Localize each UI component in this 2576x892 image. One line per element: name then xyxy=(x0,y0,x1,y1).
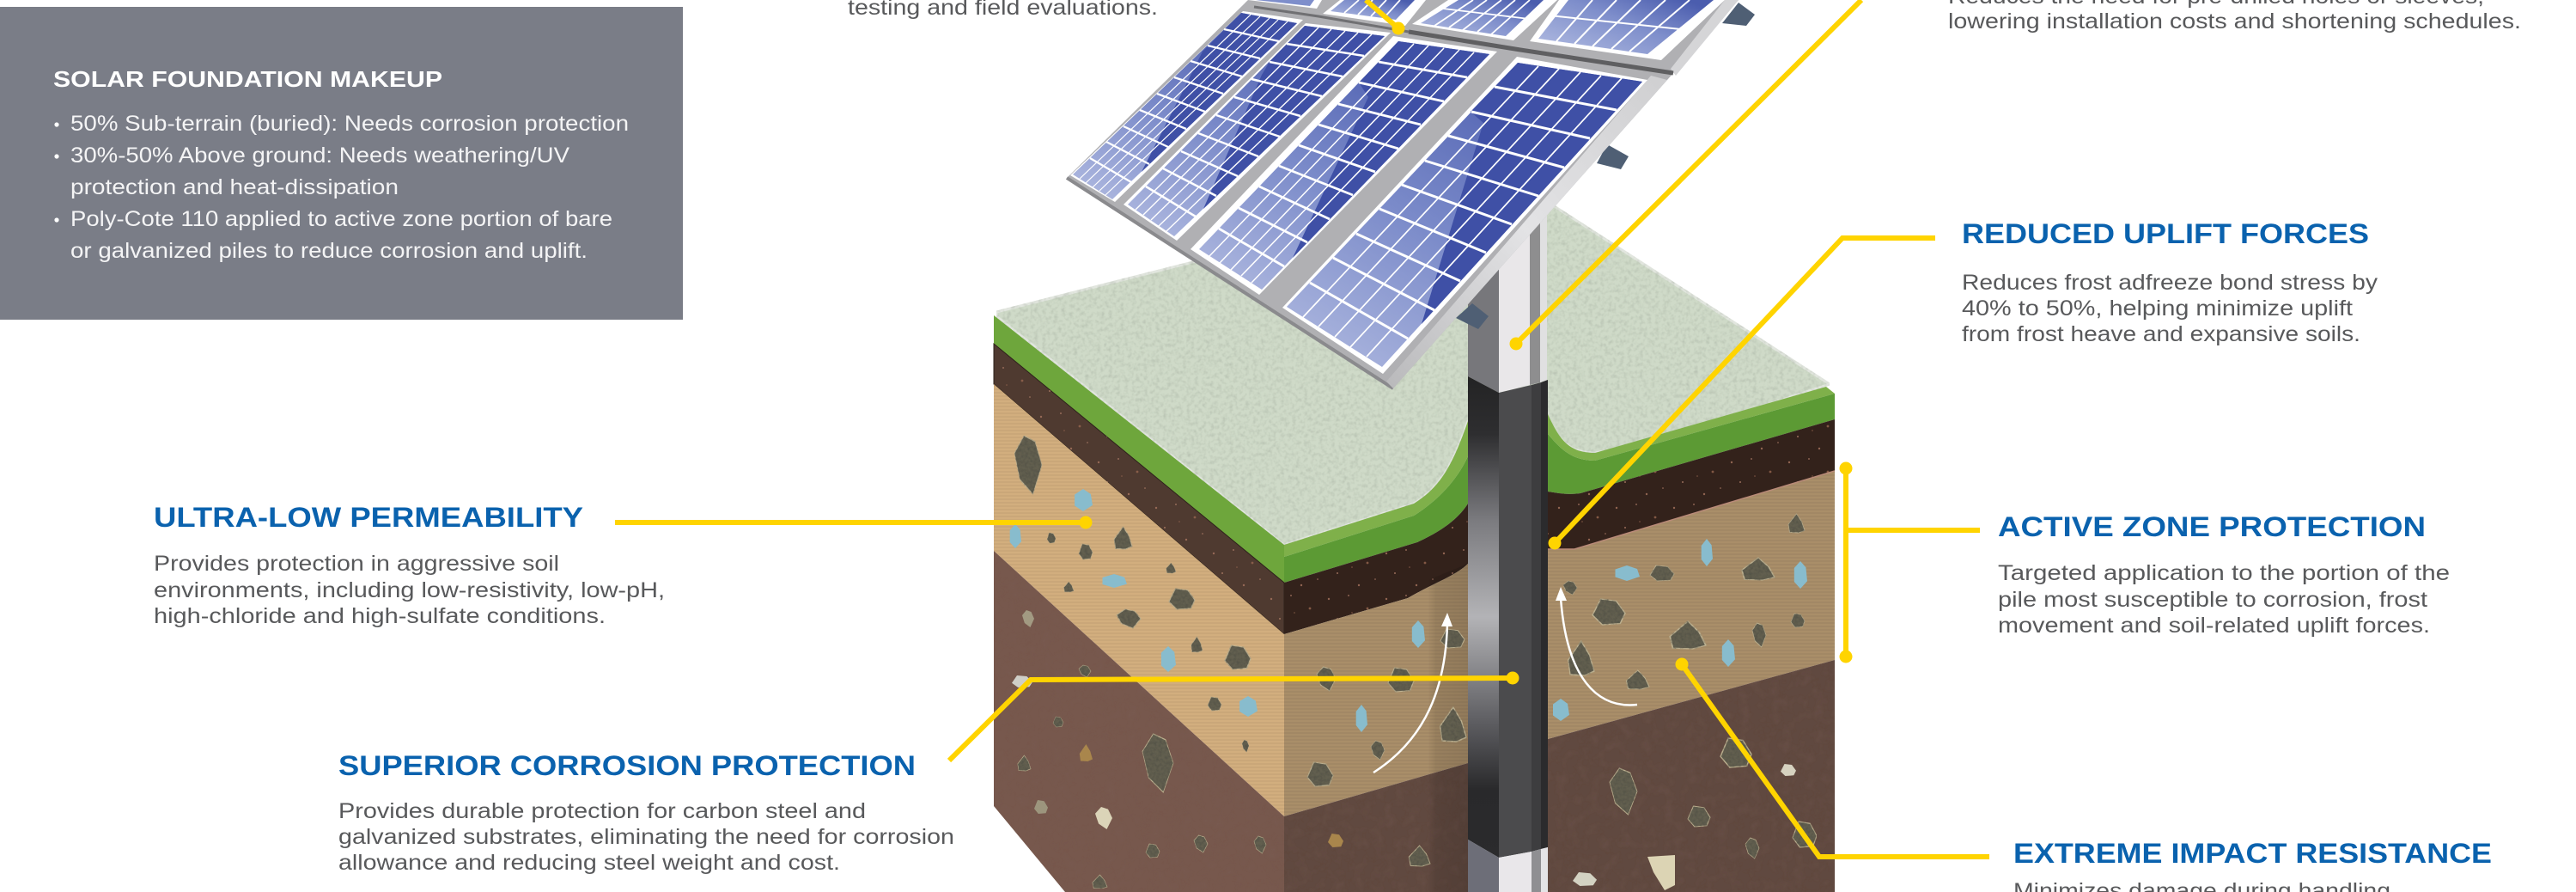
pile xyxy=(1468,198,1548,892)
leader: reduced uplift forces xyxy=(1555,238,1935,543)
leader: panels xyxy=(1366,0,1398,28)
bullet list xyxy=(54,112,629,263)
leader: extreme impact resistance xyxy=(1682,664,1989,857)
shadow beside pile xyxy=(1428,564,1468,892)
callout: superior corrosion protection: Provides durable protection for carbon steel and xyxy=(338,799,866,823)
brown subsoil layer xyxy=(994,551,1835,892)
callout: active zone protection xyxy=(1998,511,2450,638)
callout: reduced uplift forces: Reduces frost adfreeze bond stress by xyxy=(1962,271,2378,295)
callout: active zone protection: Targeted application to the portion of the xyxy=(1998,561,2450,585)
callout: superior corrosion protection: galvanized substrates, eliminating the need for corrosion xyxy=(338,825,954,849)
callout: extreme impact resistance: EXTREME IMPACT RESISTANCE xyxy=(2013,838,2492,869)
illustration: soil block with pile and solar array xyxy=(994,0,1835,892)
rocks xyxy=(1014,436,1817,889)
callout: ultra-low permeability: ULTRA-LOW PERMEABILITY xyxy=(154,502,583,533)
callout: ultra-low permeability xyxy=(154,502,665,628)
panel D xyxy=(1282,57,1647,374)
panel C xyxy=(1191,36,1497,295)
panel A xyxy=(1070,11,1303,202)
solar panel array xyxy=(1067,0,1739,388)
panel: solar foundation makeup xyxy=(0,7,683,320)
callout: extreme impact resistance xyxy=(2013,838,2492,892)
leader: active zone bracket xyxy=(1846,468,1980,657)
bullet list: Poly-Cote 110 applied to active zone portion of bare xyxy=(70,207,612,231)
uplift arrows xyxy=(1373,587,1637,773)
coated active zone xyxy=(1468,376,1548,858)
leader: ultra-low permeability xyxy=(615,520,1086,525)
callout: active zone protection: movement and soil-related uplift forces. xyxy=(1998,614,2430,638)
panel B xyxy=(1124,23,1391,241)
bullet list: 30%-50% Above ground: Needs weathering/UV xyxy=(70,144,569,168)
callout: ultra-low permeability: environments, including low-resistivity, low-pH, xyxy=(154,578,665,602)
callout: ultra-low permeability: high-chloride and high-sulfate conditions. xyxy=(154,604,606,628)
callout: installation text xyxy=(1948,0,2521,34)
bullet list: 50% Sub-terrain (buried): Needs corrosion protection xyxy=(70,112,629,136)
callout: reduced uplift forces xyxy=(1962,218,2378,346)
leader: superior corrosion protection xyxy=(949,678,1513,761)
callout: installation text: lowering installation costs and shortening schedules. xyxy=(1948,9,2521,34)
mounting brackets xyxy=(1456,3,1755,329)
grass edge xyxy=(994,315,1835,583)
bullet list: protection and heat-dissipation xyxy=(70,175,399,199)
callout: superior corrosion protection: SUPERIOR CORROSION PROTECTION xyxy=(338,750,916,781)
panel heading: SOLAR FOUNDATION MAKEUP xyxy=(53,66,442,92)
water pockets xyxy=(1010,489,1807,732)
leader lines xyxy=(615,0,1989,857)
callout: reduced uplift forces: 40% to 50%, helping minimize uplift xyxy=(1962,296,2353,321)
callout: reduced uplift forces: REDUCED UPLIFT FORCES xyxy=(1962,218,2369,249)
callout: superior corrosion protection: allowance and reducing steel weight and cost. xyxy=(338,851,840,875)
callout: active zone protection: pile most susceptible to corrosion, frost xyxy=(1998,588,2427,612)
light pebbles xyxy=(1012,610,1796,890)
callout: reduced uplift forces: from frost heave and expansive soils. xyxy=(1962,322,2360,346)
gravel ground surface xyxy=(996,180,1830,545)
tan soil layer xyxy=(994,384,1835,816)
top row panels xyxy=(1248,0,1725,73)
leader dots xyxy=(1079,22,1852,684)
callout: active zone protection: ACTIVE ZONE PROTECTION xyxy=(1998,511,2426,542)
callout: superior corrosion protection xyxy=(338,750,954,875)
callout: ultra-low permeability: Provides protection in aggressive soil xyxy=(154,552,559,576)
dark topsoil layer xyxy=(994,344,1835,634)
bullet list: or galvanized piles to reduce corrosion and uplift. xyxy=(70,239,588,263)
leader: pile top xyxy=(1516,0,1861,344)
